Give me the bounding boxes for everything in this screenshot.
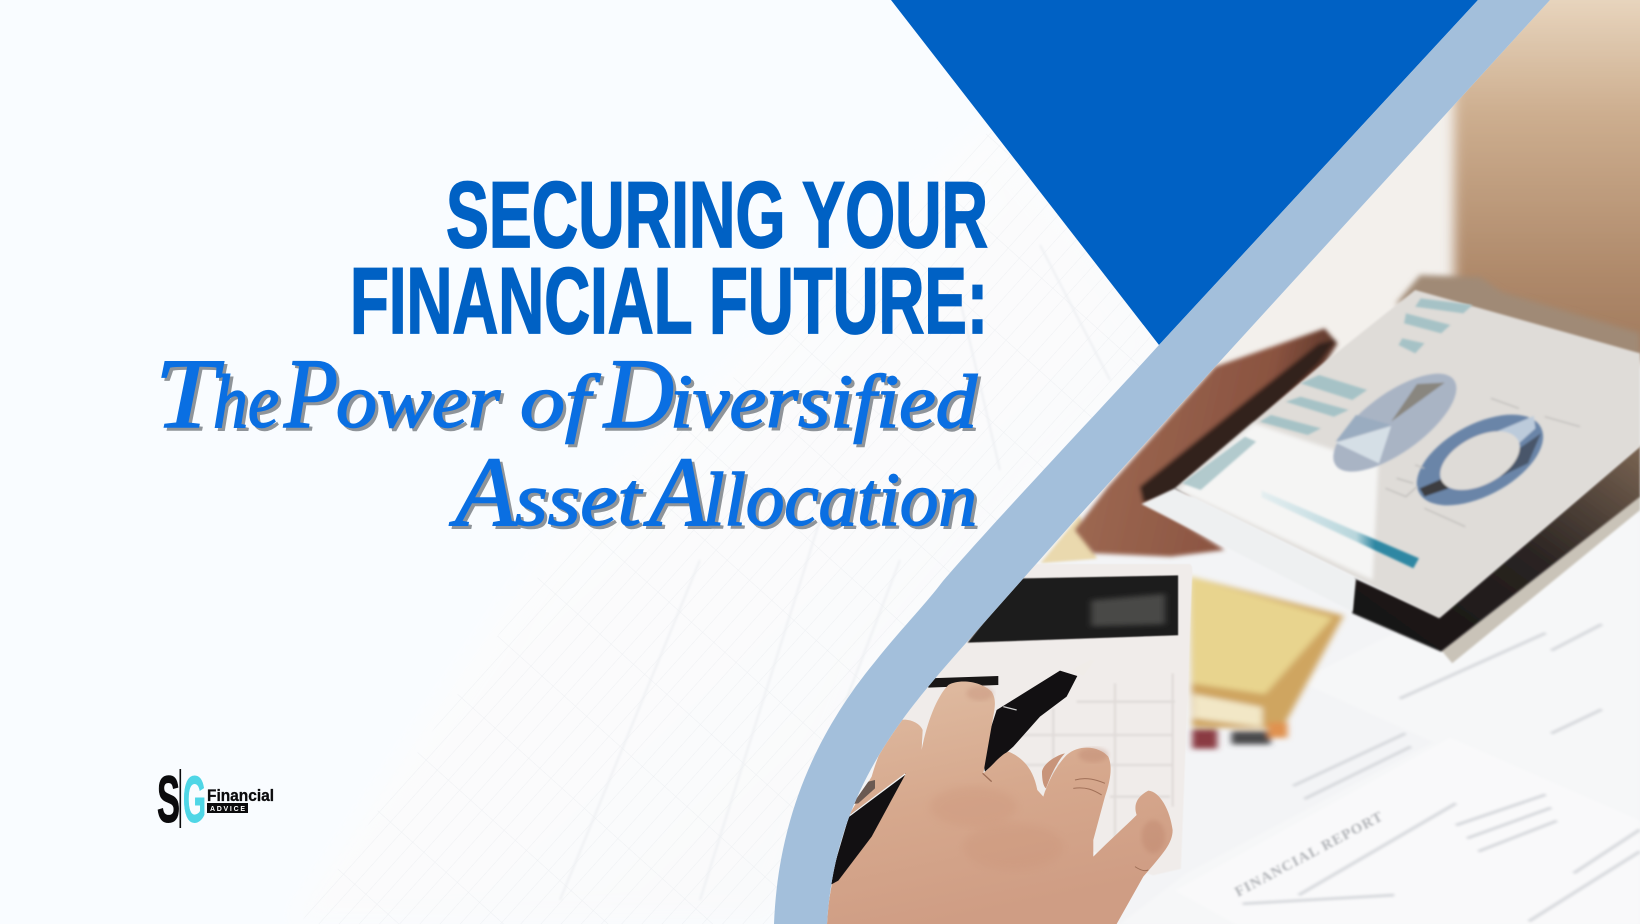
logo: SG Financial Advice: Financial	[207, 786, 274, 805]
subtitle face: iversified	[670, 360, 978, 444]
paper sheets	[1119, 511, 1640, 924]
pen lower section	[828, 773, 906, 886]
pen upper section	[984, 670, 1078, 772]
subtitle shadow: T	[158, 341, 227, 452]
subtitle face: D	[602, 338, 674, 449]
faded building backdrop	[285, 120, 1170, 924]
logo: SG Financial Advice	[157, 762, 274, 836]
calculator body and display	[889, 564, 1192, 875]
photo tablet group	[1075, 290, 1640, 663]
subtitle face: ower	[336, 360, 500, 444]
calculator small bar	[927, 676, 998, 688]
subtitle face: T	[155, 338, 224, 449]
photo tablet back edge	[1395, 275, 1640, 360]
title: Securing Your Financial Future: FINANCIAL FUTURE:	[350, 248, 988, 353]
subtitle shadow: llocation	[706, 461, 980, 545]
photo: desk with tablet and calculator	[760, 0, 1640, 924]
tan desk object	[1041, 515, 1097, 563]
subtitle shadow: he	[216, 363, 282, 447]
logo: SG Financial Advice: S	[157, 762, 180, 836]
light blue curved band	[774, 0, 1550, 924]
tablet leader lines	[1386, 398, 1580, 527]
subtitle face: A	[449, 436, 518, 547]
subtitle shadow: of	[523, 363, 604, 447]
title: Securing Your Financial Future	[350, 162, 988, 353]
subtitle: The Power of Diversified Asset Allocation	[155, 338, 981, 550]
tablet screen	[1141, 290, 1640, 618]
photo papers and notebook	[889, 511, 1640, 924]
hand holding tablet	[1075, 328, 1338, 557]
photo brown wall panel	[1454, 0, 1640, 360]
photo paper heading: FINANCIAL REPORT	[1232, 809, 1386, 901]
calculator keys	[1023, 674, 1174, 836]
blue triangle	[891, 0, 1478, 345]
subtitle shadow: A	[646, 439, 712, 550]
subtitle shadow	[158, 341, 981, 550]
logo: SG Financial Advice: G	[183, 762, 206, 836]
subtitle shadow: P	[286, 341, 341, 452]
subtitle face: of	[520, 360, 601, 444]
photo base: cream wall and pale desk	[840, 104, 1455, 924]
logo: SG Financial Advice: ADVICE	[210, 806, 245, 813]
subtitle shadow: ower	[339, 363, 503, 447]
subtitle face: P	[283, 338, 338, 449]
tablet body: bezel and edge	[1352, 445, 1640, 663]
subtitle shadow: A	[452, 439, 521, 550]
pie chart	[1332, 372, 1458, 473]
subtitle face: A	[643, 436, 709, 547]
yellow notebook	[1189, 576, 1344, 749]
subtitle shadow: sset	[518, 461, 646, 545]
subtitle face: sset	[515, 458, 643, 542]
tablet progress bar	[1262, 491, 1419, 568]
tablet bar labels	[1182, 298, 1473, 490]
donut chart	[1415, 413, 1544, 507]
subtitle face	[155, 338, 978, 547]
subtitle face: llocation	[703, 458, 977, 542]
subtitle shadow: iversified	[673, 363, 981, 447]
photo foreground hand group	[825, 660, 1175, 924]
paper text lines	[1243, 624, 1640, 921]
subtitle face: he	[213, 360, 279, 444]
subtitle shadow: D	[605, 341, 677, 452]
hand	[825, 682, 1173, 924]
title: Securing Your Financial Future: SECURING YOUR	[446, 162, 988, 267]
